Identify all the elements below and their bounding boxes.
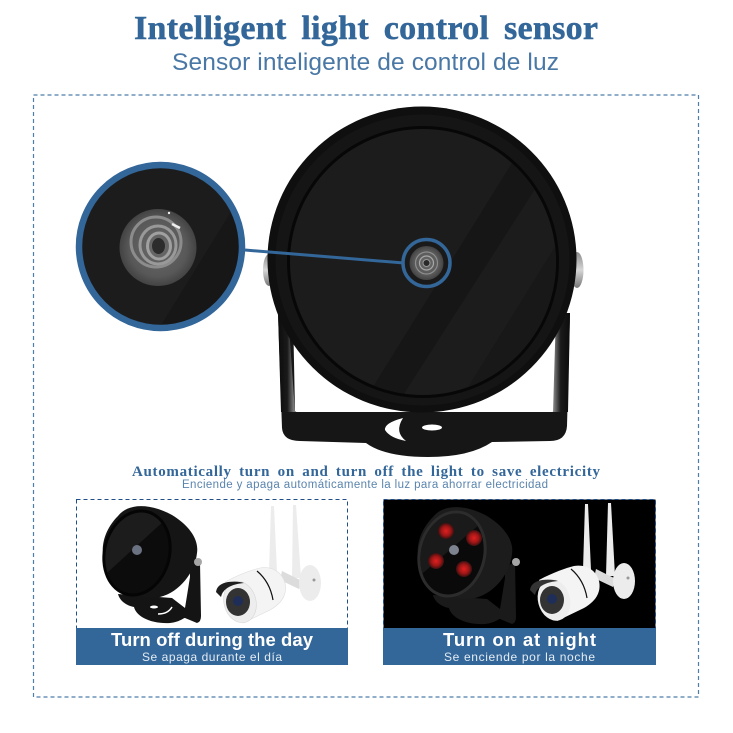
banner: night: Turn on at night — [443, 629, 596, 650]
bracket — [278, 313, 570, 457]
icon: night light fixture with IR LEDs — [417, 507, 520, 624]
main light fixture — [263, 106, 584, 457]
connector line — [245, 250, 404, 263]
small sensor callout — [403, 240, 450, 286]
panel: day — [76, 500, 348, 665]
outer rim — [268, 106, 576, 412]
side bolts — [263, 254, 275, 286]
banner: day — [76, 628, 348, 665]
subtitle: Sensor inteligente de control de luz — [172, 49, 559, 76]
caption subtitle: Enciende y apaga automáticamente la luz para ahorrar electricidad — [182, 479, 548, 491]
panel: night — [383, 500, 656, 665]
magnified sensor callout — [79, 165, 250, 335]
icon: day light fixture — [102, 506, 202, 624]
banner: night: Se enciende por la noche — [444, 650, 595, 664]
sensor lens — [120, 209, 196, 286]
lens disc — [287, 126, 559, 398]
banner: night — [383, 628, 656, 665]
banner: day: Turn off during the day — [111, 629, 314, 650]
title: Intelligent light control sensor — [134, 10, 598, 47]
banner: day: Se apaga durante el día — [142, 650, 282, 664]
outer dashed frame — [34, 95, 698, 697]
icon: night wifi camera — [530, 503, 635, 624]
caption: Automatically turn on and turn off the light to save electricity — [132, 464, 600, 480]
icon: day wifi camera — [216, 505, 321, 626]
